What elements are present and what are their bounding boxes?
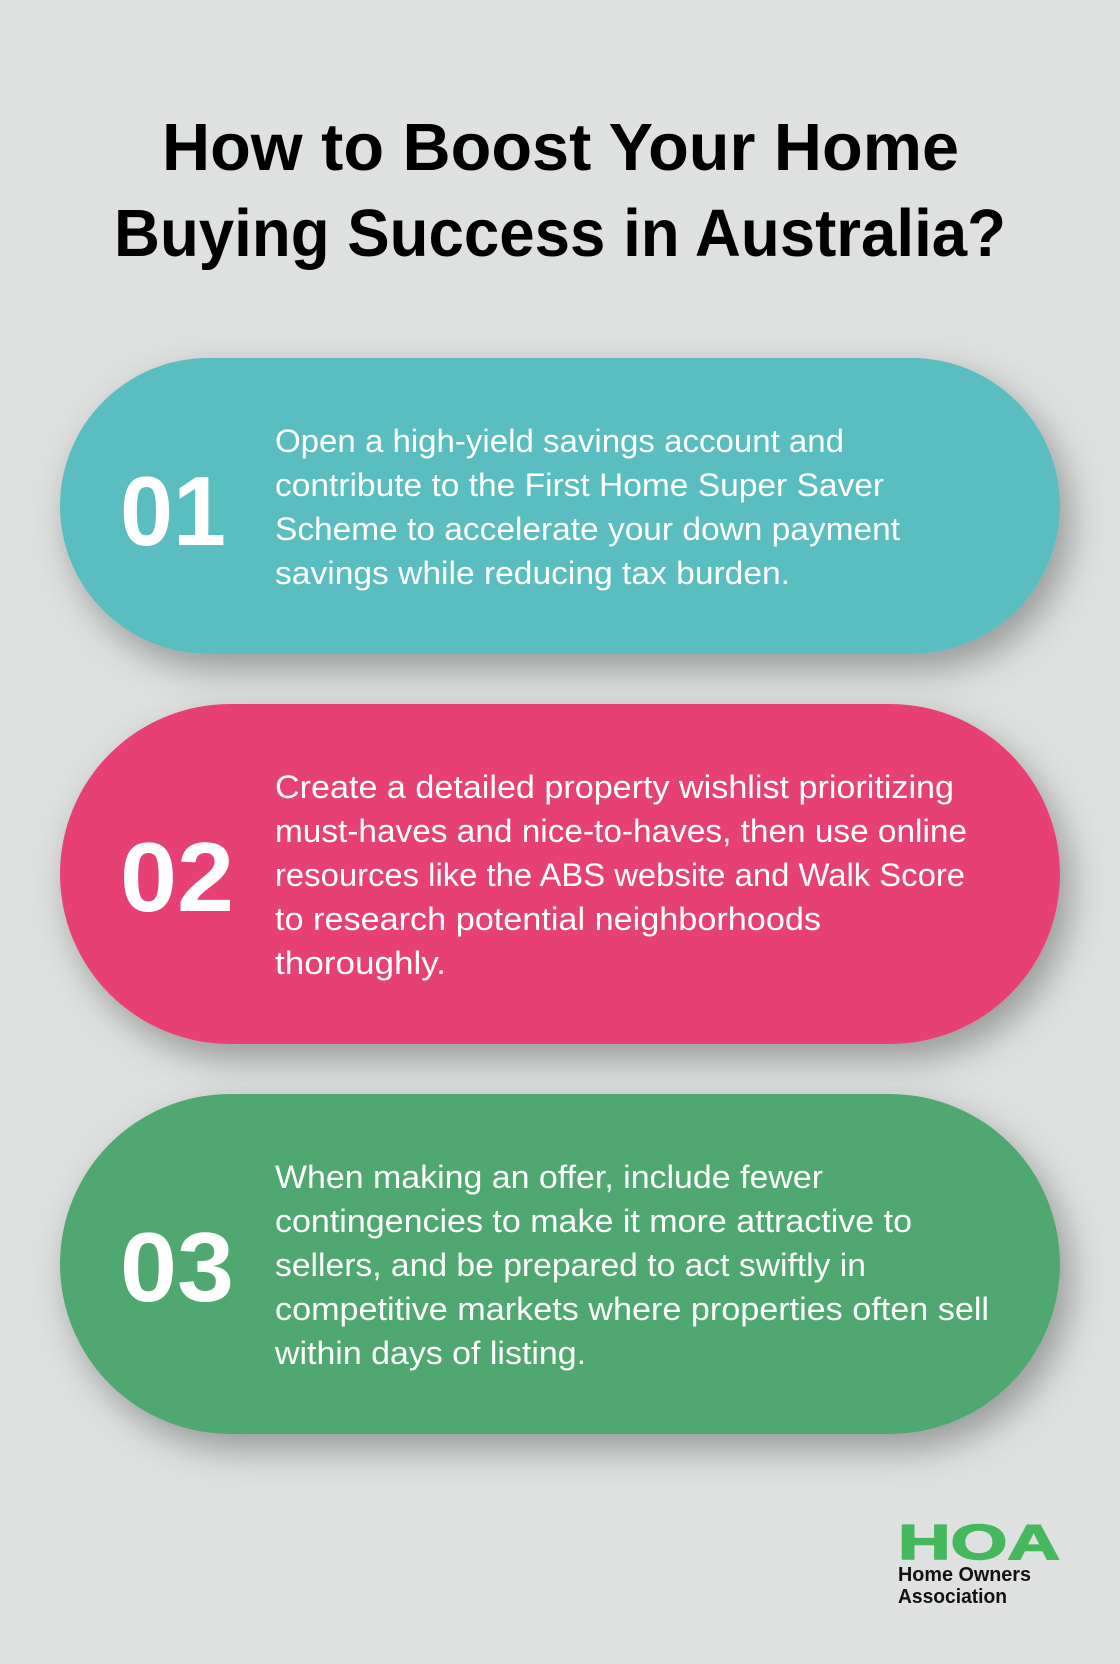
panel: step 03 bbox=[60, 1094, 1060, 1434]
text block: step 02 description bbox=[275, 769, 967, 981]
text block: step 03 description: sellers, and be prepared to act swiftly in bbox=[275, 1247, 866, 1283]
pill background: teal bbox=[60, 358, 1060, 654]
text block: step 01 description: savings while reducing tax burden. bbox=[275, 555, 790, 591]
text block: step 01 description: Open a high-yield savings account and bbox=[275, 423, 844, 459]
text block: step 02 description: Create a detailed property wishlist prioritizing bbox=[275, 769, 954, 805]
number 01: 01 bbox=[120, 456, 226, 566]
title: How to Boost Your Home bbox=[162, 110, 959, 185]
text block: step 03 description: competitive markets where properties often sell bbox=[275, 1291, 989, 1327]
text block: step 01 description: Scheme to accelerate your down payment bbox=[275, 511, 900, 547]
title bbox=[114, 110, 1006, 271]
number 02: 02 bbox=[120, 822, 234, 932]
text block: step 01 description: contribute to the First Home Super Saver bbox=[275, 467, 884, 503]
text block: step 03 description bbox=[274, 1159, 989, 1371]
text block: step 03 description: contingencies to make it more attractive to bbox=[275, 1203, 912, 1239]
logo wordmark HOA: HOA bbox=[898, 1516, 1060, 1570]
logo caption: Association bbox=[898, 1586, 1007, 1608]
text block: step 03 description: within days of listing. bbox=[274, 1335, 586, 1371]
pill background: green bbox=[60, 1094, 1060, 1434]
panel: step 02 bbox=[60, 704, 1060, 1044]
text block: step 02 description: thoroughly. bbox=[275, 945, 446, 981]
logo: HOA Home Owners Association bbox=[898, 1516, 1060, 1608]
text block: step 02 description: resources like the ABS website and Walk Score bbox=[275, 857, 965, 893]
text block: step 03 description: When making an offer, include fewer bbox=[275, 1159, 823, 1195]
panel: step 01 bbox=[60, 358, 1060, 654]
title: Buying Success in Australia? bbox=[114, 196, 1006, 271]
number 03: 03 bbox=[120, 1212, 234, 1322]
logo caption: Home Owners bbox=[898, 1564, 1031, 1586]
logo caption bbox=[898, 1564, 1031, 1608]
text block: step 02 description: to research potential neighborhoods bbox=[275, 901, 821, 937]
text block: step 02 description: must-haves and nice-to-haves, then use online bbox=[275, 813, 967, 849]
pill background: pink bbox=[60, 704, 1060, 1044]
text block: step 01 description bbox=[275, 423, 900, 591]
